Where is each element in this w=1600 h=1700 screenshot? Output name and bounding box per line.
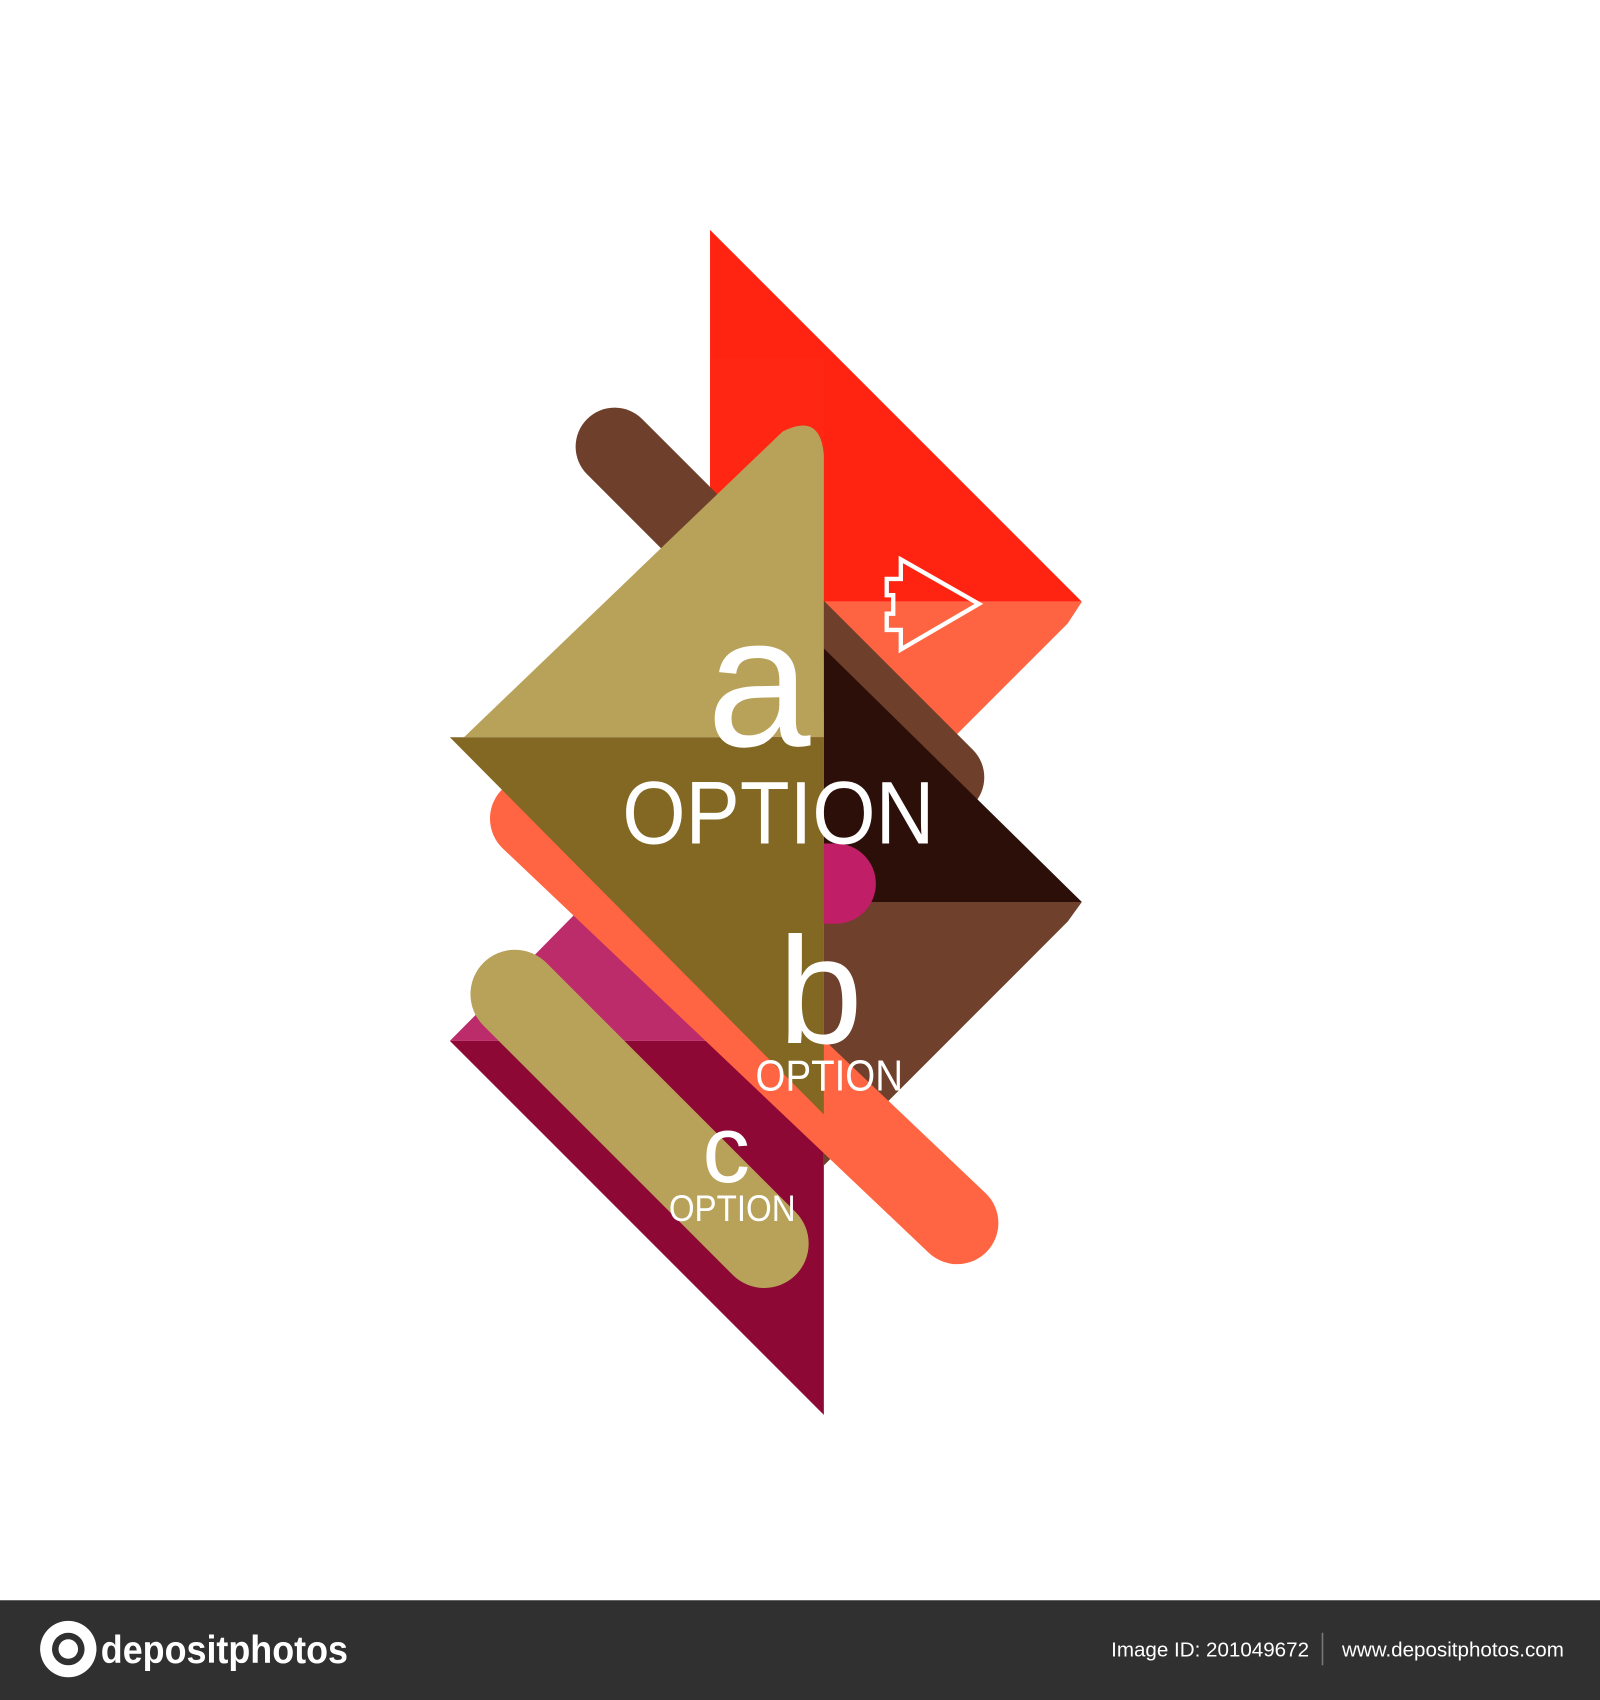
brand text: depositphotos bbox=[101, 1629, 348, 1672]
text block: option b: b bbox=[778, 907, 863, 1076]
text block: option c: OPTION bbox=[669, 1188, 796, 1229]
magenta tab bbox=[780, 843, 876, 924]
panel: olive triangle bbox=[450, 425, 824, 1115]
brown bar bbox=[615, 447, 945, 777]
website: www.depositphotos.com bbox=[1341, 1639, 1564, 1662]
orange bar bbox=[531, 819, 957, 1223]
panel: dark brown diamond half bbox=[824, 648, 1082, 1165]
text block: option c: c bbox=[702, 1097, 750, 1203]
text block: option a: a bbox=[707, 577, 811, 786]
olive bar c bbox=[515, 994, 764, 1244]
text block: option b: OPTION bbox=[756, 1053, 903, 1101]
image id: Image ID: 201049672 bbox=[1111, 1639, 1309, 1662]
text block: option a: OPTION bbox=[622, 763, 934, 862]
footer bar bbox=[0, 1600, 1600, 1700]
panel: magenta triangle bbox=[450, 661, 824, 1415]
icon: logo bbox=[40, 1621, 96, 1677]
text block: option b bbox=[756, 907, 903, 1101]
icon: arrow outline bbox=[887, 559, 979, 649]
text block: option a bbox=[622, 577, 934, 862]
panel: red arrow triangle bbox=[710, 230, 1082, 737]
text block: option c bbox=[669, 1097, 796, 1229]
